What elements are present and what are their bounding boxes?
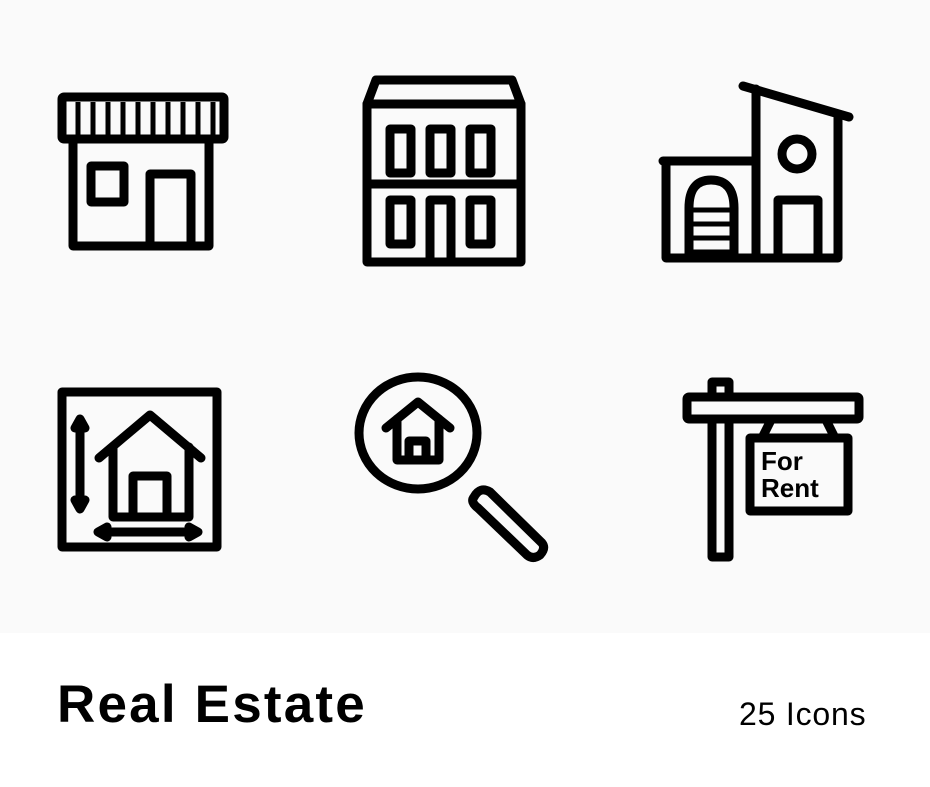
title: Real Estate — [57, 675, 367, 734]
icon count: 25 Icons — [739, 696, 866, 732]
icon: for rent sign — [687, 382, 859, 557]
icon: property search — [359, 377, 544, 558]
sign text: For — [761, 446, 803, 476]
sign text — [761, 446, 819, 503]
icon: floor plan — [62, 392, 217, 547]
icon: modern house — [663, 86, 849, 258]
icon: townhouse — [367, 80, 521, 262]
icon: shop — [62, 97, 224, 246]
sign text: Rent — [761, 473, 819, 503]
